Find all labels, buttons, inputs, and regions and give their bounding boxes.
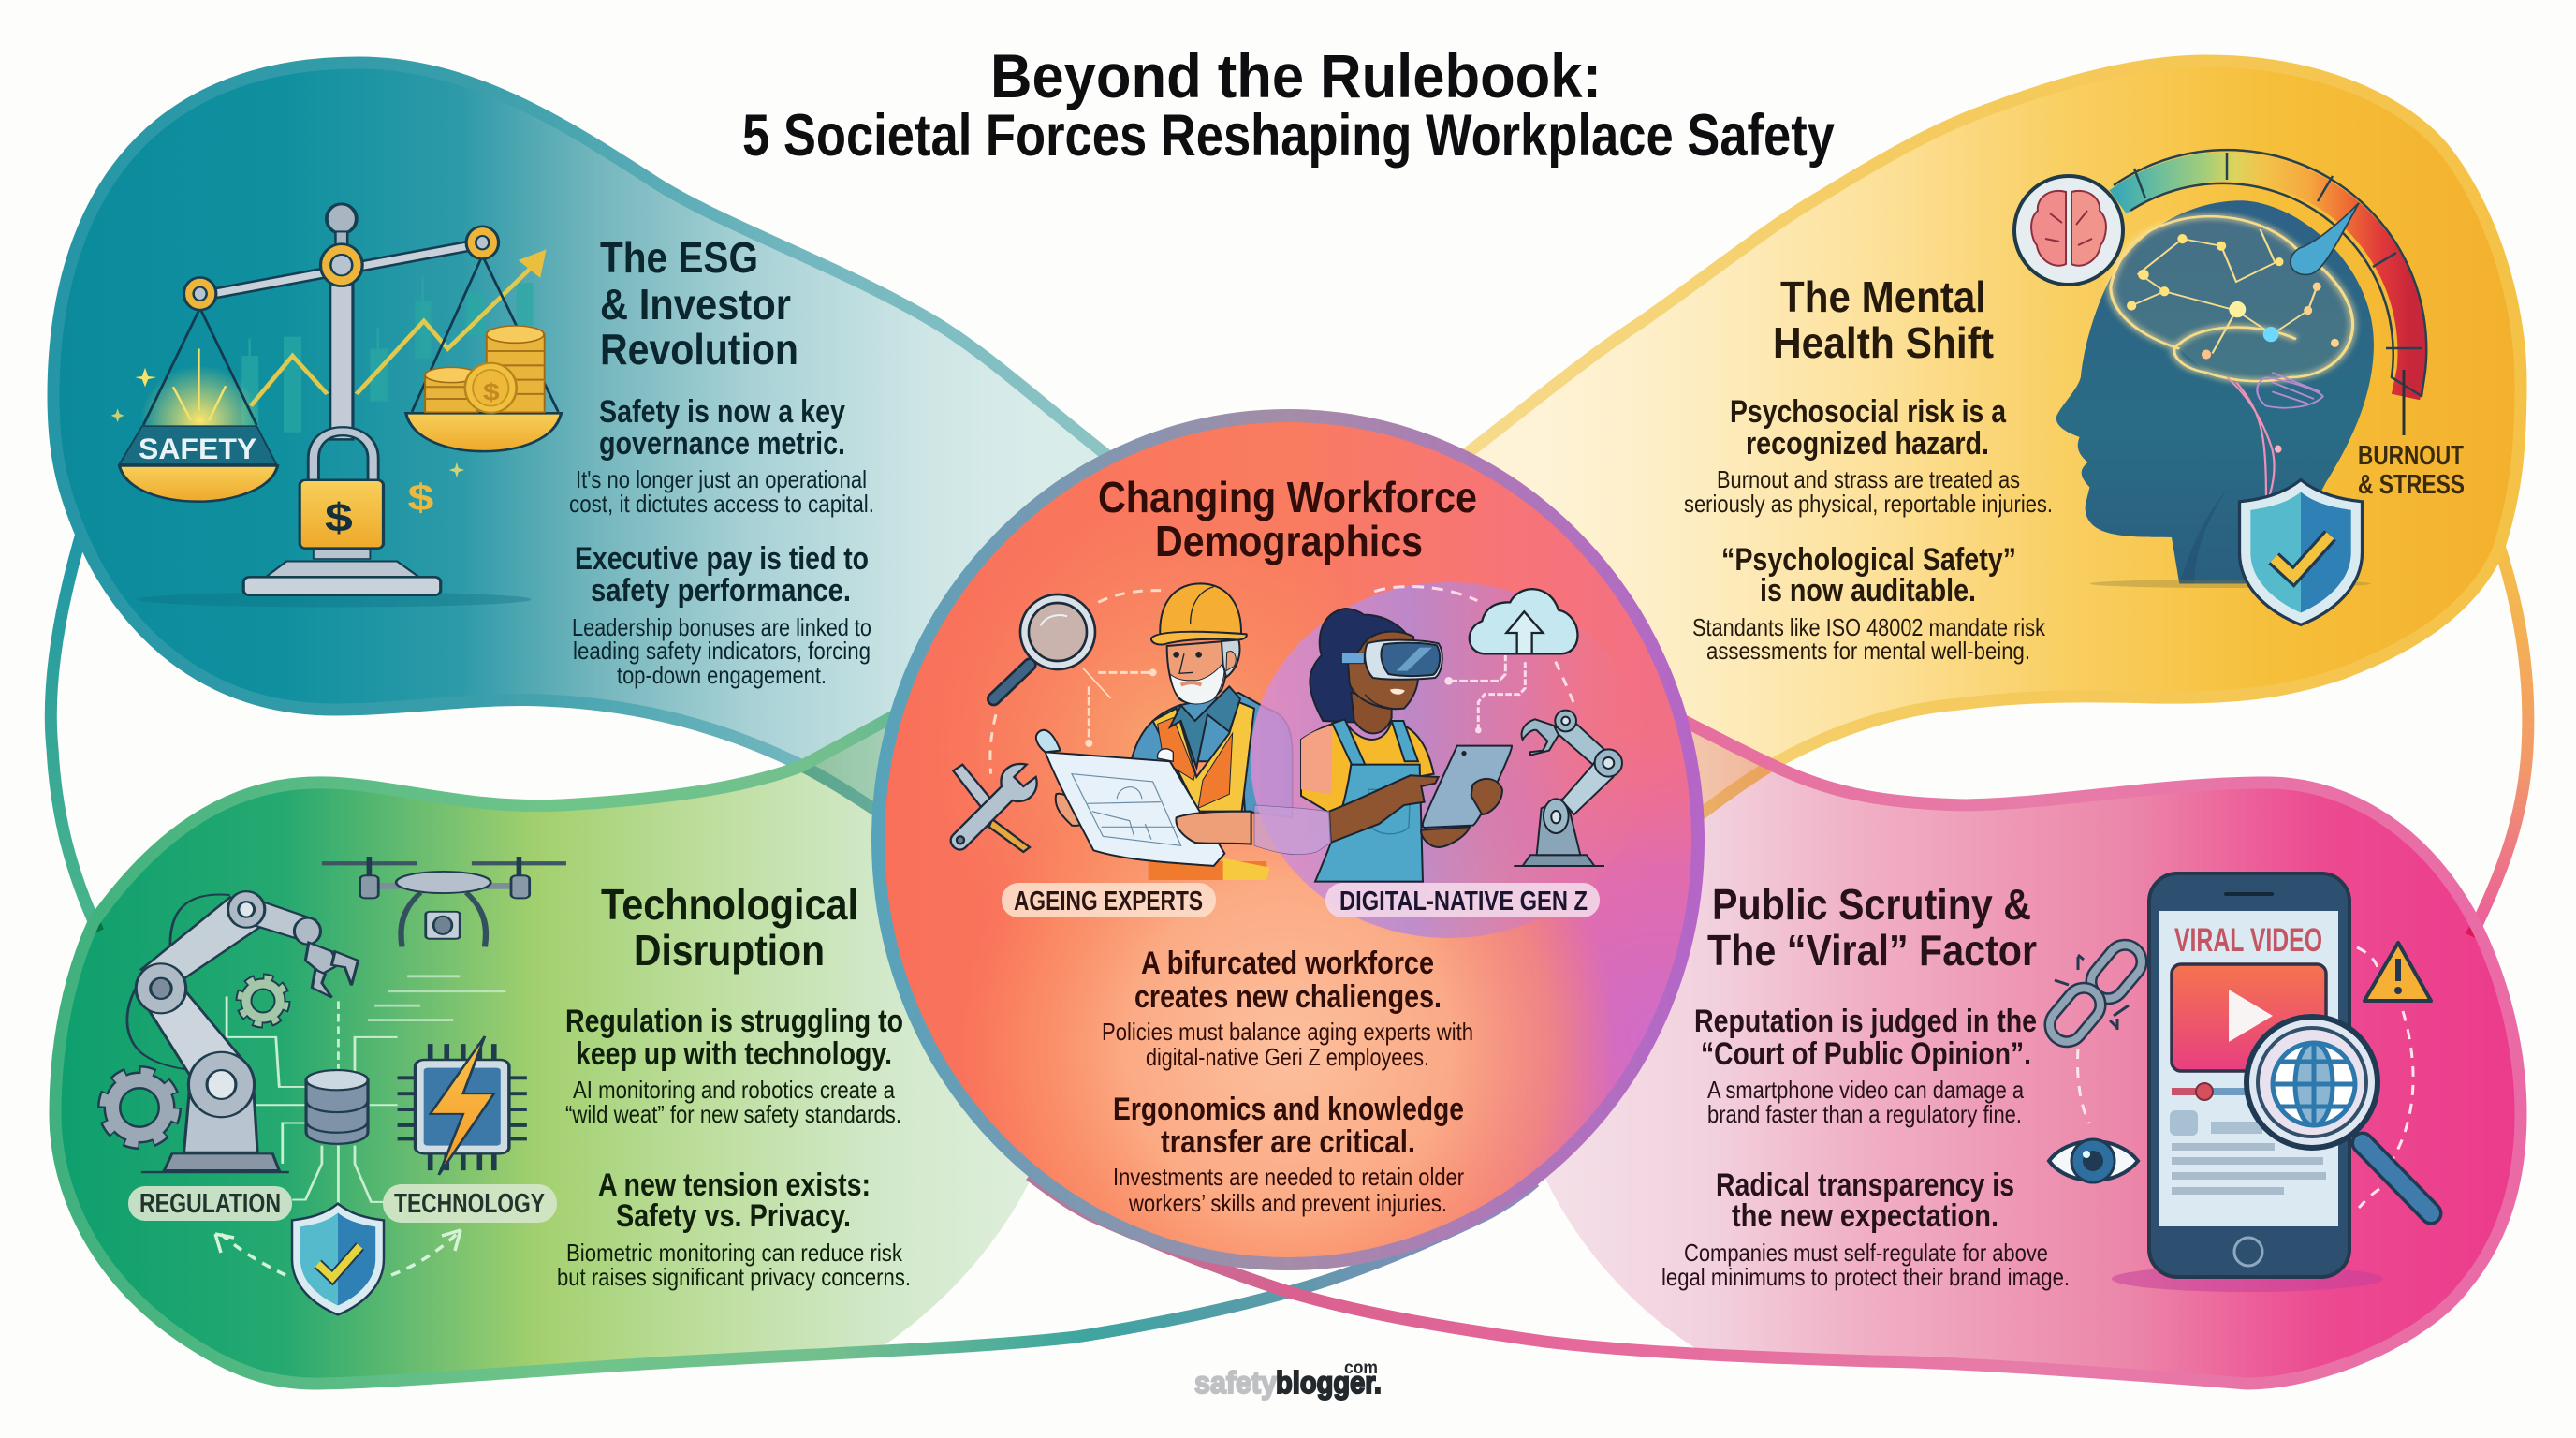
title: 5 Societal Forces Reshaping Workplace Safety (742, 103, 1835, 169)
heading: Technological Disruption: Technological (601, 880, 858, 929)
icon: circuit lines (227, 976, 505, 1204)
text block: psychological safety: is now auditable. (1760, 573, 1976, 609)
label: DIGITAL-NATIVE GEN Z: DIGITAL-NATIVE GEN Z (1339, 887, 1588, 917)
text block: executive pay: top-down engagement. (617, 661, 827, 689)
text block: bifurcated workforce: Policies must balance aging experts with (1102, 1018, 1473, 1046)
label: VIRAL VIDEO: VIRAL VIDEO (2174, 922, 2322, 959)
icon: dashed links for Gen Z (1374, 586, 1575, 733)
heading: Changing Workforce Demographics: Demographics (1155, 517, 1423, 565)
icon: robot arm (127, 891, 358, 1172)
icon: head silhouette with glowing brain (2056, 200, 2374, 588)
blob fill: teal (53, 63, 1170, 843)
text block: psychosocial risk (1684, 394, 2053, 518)
logo: safetyblogger.com: com (1344, 1358, 1378, 1378)
text block: regulation struggling (565, 1004, 903, 1128)
text block: ergonomics and knowledge transfer: transfer are critical. (1161, 1124, 1415, 1160)
overlap tint: generational venn (1251, 582, 1647, 938)
icon: dashed links for ageing expert (990, 591, 1164, 774)
icon: digital-native Gen Z worker with VR headset (1254, 609, 1512, 882)
label: SAFETY: SAFETY (139, 433, 256, 465)
text block: safety vs privacy: A new tension exists: (598, 1167, 871, 1203)
logo: safetyblogger.com: blogger. (1276, 1365, 1382, 1400)
panel: Changing Workforce Demographics (878, 416, 1698, 1264)
icon: security shield (2239, 480, 2363, 624)
blob outline: green (55, 693, 1535, 1384)
text block: safety vs privacy: but raises significant privacy concerns. (557, 1263, 911, 1291)
panel: The ESG & Investor Revolution (53, 63, 1170, 843)
text block: ergonomics and knowledge transfer: Ergonomics and knowledge (1113, 1092, 1464, 1127)
text block: bifurcated workforce: digital-native Geri Z employees. (1146, 1043, 1429, 1071)
label: TECHNOLOGY (383, 1184, 557, 1223)
text block: regulation struggling: Regulation is struggling to (565, 1004, 903, 1039)
heading: ESG: Revolution (600, 325, 798, 374)
panel: Technological Disruption (55, 693, 1535, 1384)
text block: psychological safety (1692, 542, 2046, 665)
icon: security shield with check (292, 1204, 384, 1314)
heading: ESG: The ESG (600, 233, 758, 282)
text block: radical transparency: Radical transparency is (1716, 1167, 2014, 1203)
blob outline: yellow (1442, 61, 2521, 819)
icon: balance scale with padlock, coins and rising chart: $ (408, 477, 433, 519)
text block: radical transparency: Companies must self-regulate for above (1684, 1239, 2048, 1267)
label: burnout and stress: BURNOUT (2358, 441, 2464, 471)
text block: governance metric: It's no longer just an operational (576, 465, 867, 493)
label: REGULATION: REGULATION (139, 1189, 281, 1219)
text block: psychosocial risk: recognized hazard. (1746, 426, 1989, 462)
panel: The Mental Health Shift (1404, 61, 2521, 819)
icon: processor chip with lightning bolt (398, 1036, 527, 1175)
heading: Public Scrutiny (1707, 880, 2037, 975)
icon: smartphone with viral video (2112, 873, 2383, 1292)
icon: crossed wrench and screwdriver (951, 764, 1037, 852)
blob fill: pink (1404, 697, 2521, 1384)
label: AGEING EXPERTS: AGEING EXPERTS (1014, 887, 1203, 917)
heading: ESG (600, 233, 798, 374)
text block: psychological safety: assessments for mental well-being. (1706, 637, 2030, 665)
blob outline: pink (1030, 697, 2521, 1384)
text block: court of public opinion (1694, 1004, 2037, 1128)
heading: Public Scrutiny: The “Viral” Factor (1707, 926, 2037, 975)
text block: court of public opinion: A smartphone video can damage a (1707, 1076, 2024, 1104)
text block: radical transparency (1661, 1167, 2070, 1291)
icon: balance scale with padlock, coins and rising chart: $ (483, 379, 500, 406)
text block: executive pay: Leadership bonuses are linked to (572, 613, 871, 641)
icon: balance scale with padlock, coins and rising chart: $ (325, 495, 353, 540)
blob outline: teal (53, 63, 1123, 819)
heading: Changing Workforce Demographics: Changing Workforce (1098, 473, 1477, 521)
text block: governance metric: governance metric. (599, 426, 845, 462)
heading: Changing Workforce Demographics (1098, 473, 1477, 565)
text block: governance metric (569, 394, 874, 518)
text block: safety vs privacy: Safety vs. Privacy. (616, 1198, 851, 1234)
icon: stress gauge arc (2114, 150, 2426, 435)
blob fill: green (55, 693, 1217, 1384)
text block: bifurcated workforce: A bifurcated workforce (1141, 946, 1434, 981)
arrows: dashed tension arrows (215, 1230, 461, 1275)
heading: Mental Health (1773, 272, 1994, 367)
circle background (878, 416, 1698, 1264)
label: TECHNOLOGY: TECHNOLOGY (394, 1189, 545, 1219)
icon: large gear (104, 1072, 175, 1143)
title: Beyond the Rulebook: (990, 41, 1602, 110)
text block: regulation struggling: keep up with technology. (576, 1036, 892, 1072)
icon: drone (322, 857, 566, 946)
text block: executive pay: safety performance. (591, 573, 851, 609)
label: burnout and stress (2358, 441, 2465, 500)
icon: small gear (240, 977, 286, 1024)
text block: bifurcated workforce (1102, 946, 1473, 1071)
text block: regulation struggling: “wild weat” for new safety standards. (565, 1100, 901, 1128)
text block: executive pay (572, 541, 871, 689)
title (742, 41, 1835, 169)
icon: cloud upload (1470, 589, 1577, 653)
heading: Technological Disruption (601, 880, 858, 975)
heading: Technological Disruption: Disruption (634, 926, 825, 975)
icon: ageing expert worker (1036, 583, 1293, 880)
ribbon: left connector (51, 524, 98, 932)
heading: ESG: & Investor (600, 280, 791, 329)
text block: safety vs privacy (557, 1167, 911, 1291)
text block: psychological safety: “Psychological Safety” (1721, 542, 2016, 578)
text block: ergonomics and knowledge transfer (1113, 1092, 1464, 1217)
blob fill: yellow (1404, 61, 2521, 819)
icon: broken chain link (2043, 938, 2148, 1049)
text block: executive pay: Executive pay is tied to (575, 541, 869, 577)
heading: Mental Health: Health Shift (1773, 318, 1994, 367)
icon: database cylinder (306, 1070, 368, 1144)
text block: radical transparency: legal minimums to protect their brand image. (1661, 1263, 2070, 1291)
heading: Mental Health: The Mental (1780, 272, 1986, 321)
logo: safetyblogger.com: safety (1194, 1365, 1278, 1400)
icon: magnifying glass (994, 594, 1095, 699)
icon: eye (2049, 1139, 2138, 1182)
text block: regulation struggling: AI monitoring and robotics create a (573, 1076, 895, 1104)
heading: Public Scrutiny: Public Scrutiny & (1712, 880, 2031, 929)
panel: Public Scrutiny & The Viral Factor (1030, 697, 2521, 1384)
icon: robotic arm (1514, 711, 1622, 866)
icon: magnifying glass over globe (2247, 1017, 2431, 1213)
icon: dashed connections (2078, 947, 2413, 1208)
text block: psychosocial risk: Psychosocial risk is a (1730, 394, 2007, 430)
icon: small brain badge (2014, 176, 2123, 285)
icon: balance scale with padlock, coins and rising chart (111, 204, 562, 607)
text block: executive pay: leading safety indicators, forcing (573, 637, 871, 665)
label: burnout and stress: & STRESS (2358, 470, 2465, 500)
text block: court of public opinion: “Court of Public Opinion”. (1701, 1036, 2031, 1072)
text block: safety vs privacy: Biometric monitoring can reduce risk (566, 1239, 903, 1267)
text block: governance metric: cost, it dictutes access to capital. (569, 490, 874, 518)
text block: court of public opinion: brand faster than a regulatory fine. (1707, 1100, 2022, 1128)
text block: ergonomics and knowledge transfer: workers’ skills and prevent injuries. (1128, 1189, 1447, 1217)
logo: safetyblogger.com (1194, 1358, 1382, 1400)
text block: bifurcated workforce: creates new chalienges. (1134, 979, 1442, 1015)
text block: governance metric: Safety is now a key (599, 394, 845, 430)
icon: warning triangle (2364, 943, 2431, 1001)
text block: psychosocial risk: seriously as physical, reportable injuries. (1684, 490, 2053, 518)
text block: court of public opinion: Reputation is judged in the (1694, 1004, 2037, 1039)
text block: psychological safety: Standants like ISO 48002 mandate risk (1692, 613, 2046, 641)
text block: ergonomics and knowledge transfer: Investments are needed to retain older (1113, 1163, 1464, 1191)
text block: psychosocial risk: Burnout and strass are treated as (1717, 465, 2020, 493)
ribbon: right connector (2471, 524, 2528, 936)
text block: radical transparency: the new expectation. (1732, 1198, 1998, 1234)
